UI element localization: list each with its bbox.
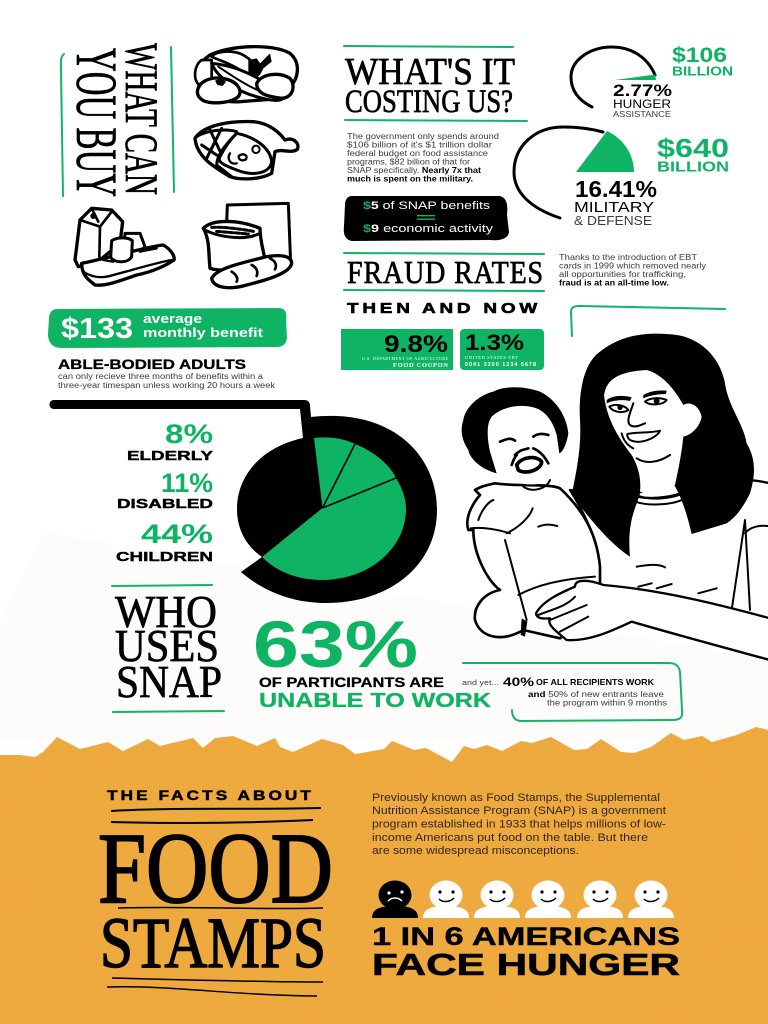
callout: 40 percent work: the program within 9 months bbox=[547, 698, 667, 708]
heading: who uses snap: USES bbox=[115, 620, 219, 671]
mother's arm lines bbox=[637, 520, 768, 610]
card: EBT 1.3 percent: 5041 3200 1234 5678 bbox=[465, 362, 536, 368]
text: fraud paragraph: Thanks to the introduction of EBT bbox=[559, 253, 697, 262]
icons: five happy people bbox=[423, 880, 674, 918]
card: food coupon 9.8 percent: 9.8% bbox=[384, 331, 448, 358]
heading: what's it costing us: COSTING US? bbox=[345, 84, 513, 120]
heading: the facts about food stamps: FOOD bbox=[98, 812, 333, 924]
chart: military arc bbox=[514, 127, 729, 228]
text: able-bodied adults: three-year timespan unless working 20 hours a week bbox=[58, 381, 276, 390]
legend: elderly disabled children: 11% bbox=[161, 468, 213, 498]
callout: 40 percent work bbox=[462, 663, 682, 721]
legend: elderly disabled children: DISABLED bbox=[117, 496, 213, 511]
legend: elderly disabled children: 8% bbox=[165, 419, 213, 449]
callout: economic activity bbox=[344, 196, 509, 241]
mother's face bbox=[604, 370, 702, 493]
text: fraud paragraph: cards in 1999 which removed nearly bbox=[559, 262, 706, 270]
heading: what's it costing us: WHAT'S IT bbox=[345, 51, 515, 93]
heading: who uses snap: WHO bbox=[115, 586, 217, 637]
callout: 40 percent work: OF ALL RECIPIENTS WORK bbox=[536, 677, 655, 687]
illustration: mother and child bbox=[462, 334, 768, 660]
stat: 63 percent unable to work: OF PARTICIPANTS ARE bbox=[259, 675, 444, 690]
legend: elderly disabled children: 44% bbox=[141, 519, 213, 549]
text: able-bodied adults bbox=[58, 357, 276, 390]
card: food coupon 9.8 percent: FOOD COUPON bbox=[393, 362, 448, 369]
heading: what can you buy bbox=[61, 43, 174, 197]
text: budget paragraph: SNAP specifically. Nearly 7x that bbox=[347, 166, 481, 175]
heading: the facts about food stamps bbox=[98, 787, 333, 996]
chart: hunger assistance arc: ASSISTANCE bbox=[613, 109, 671, 119]
text: budget paragraph: programs, $82 billion of that for bbox=[347, 158, 470, 166]
mother's hair bbox=[572, 334, 754, 557]
text: budget paragraph: federal budget on food assistance bbox=[347, 149, 489, 158]
chart: military arc: BILLION bbox=[657, 158, 729, 176]
text: intro paragraph: Nutrition Assistance Program (SNAP) is a government bbox=[372, 805, 666, 817]
chart: hunger assistance arc: $106 bbox=[672, 44, 727, 67]
chart: military arc: 16.41% bbox=[575, 176, 657, 202]
chart: military arc: $640 bbox=[657, 133, 729, 163]
chart: hunger assistance arc: 2.77% bbox=[613, 81, 672, 100]
icon: grains and bread bbox=[203, 203, 292, 288]
text: intro paragraph bbox=[372, 792, 666, 857]
callout: 133 dollars monthly benefit bbox=[48, 308, 287, 348]
heading: who uses snap: SNAP bbox=[116, 656, 222, 707]
text: intro paragraph: program established in 1933 that helps millions of low- bbox=[372, 818, 666, 830]
text: fraud paragraph: all opportunities for trafficking, bbox=[559, 270, 686, 279]
icon: dairy and eggs bbox=[75, 208, 174, 285]
mother's body bbox=[570, 480, 768, 660]
callout: 40 percent work: and 50% of new entrants leave bbox=[528, 690, 665, 699]
stat: 63 percent unable to work bbox=[253, 607, 492, 712]
stat: 63 percent unable to work: UNABLE TO WORK bbox=[259, 690, 492, 712]
legend: elderly disabled children bbox=[116, 419, 213, 564]
stat: 1 in 6 americans face hunger: 1 IN 6 AMERICANS bbox=[372, 923, 680, 951]
card: EBT 1.3 percent: 1.3% bbox=[465, 330, 524, 355]
text: fraud paragraph: fraud is at an all-time low. bbox=[559, 278, 669, 288]
text: budget paragraph bbox=[347, 132, 499, 184]
heading: fraud rates then and now: FRAUD RATES bbox=[347, 254, 544, 290]
card: food coupon 9.8 percent bbox=[341, 329, 453, 370]
callout: 133 dollars monthly benefit: monthly benefit bbox=[143, 325, 264, 340]
panel: torn orange paper bbox=[0, 720, 768, 1024]
heading: what can you buy: YOU BUY bbox=[64, 48, 129, 197]
callout: economic activity: $5 of SNAP benefits bbox=[363, 200, 491, 212]
legend: elderly disabled children: ELDERLY bbox=[127, 448, 213, 463]
card: food coupon 9.8 percent: U.S. DEPARTMENT OF AGRICULTURE bbox=[362, 356, 449, 361]
heading: the facts about food stamps: STAMPS bbox=[100, 903, 326, 983]
heading: what's it costing us bbox=[344, 46, 527, 121]
bracket line bbox=[571, 306, 725, 336]
stat: 63 percent unable to work: 63% bbox=[253, 607, 418, 681]
text: fraud paragraph bbox=[559, 253, 706, 288]
callout: 40 percent work: and yet... bbox=[462, 678, 499, 687]
text: able-bodied adults: ABLE-BODIED ADULTS bbox=[58, 357, 246, 372]
text: budget paragraph: much is spent on the military. bbox=[347, 174, 473, 184]
heading: what can you buy: WHAT CAN bbox=[115, 43, 167, 195]
chart: hunger assistance arc: HUNGER bbox=[613, 97, 671, 111]
baby's hair bbox=[462, 387, 568, 473]
text: able-bodied adults: can only recieve three months of benefits within a bbox=[58, 372, 264, 381]
text: intro paragraph: Previously known as Food Stamps, the Supplemental bbox=[372, 792, 660, 804]
chart: hunger assistance arc: BILLION bbox=[672, 64, 733, 78]
mother's hand bbox=[536, 581, 768, 660]
stat: 1 in 6 americans face hunger: FACE HUNGER bbox=[372, 947, 680, 982]
card: EBT 1.3 percent bbox=[460, 329, 544, 370]
heading: who uses snap bbox=[112, 585, 224, 712]
text: budget paragraph: $106 billion of it's $1 trillion dollar bbox=[347, 140, 492, 150]
stat: 1 in 6 americans face hunger bbox=[372, 923, 680, 982]
heading: fraud rates then and now: THEN AND NOW bbox=[347, 300, 541, 317]
chart: hunger assistance arc bbox=[571, 44, 733, 119]
chart: military arc: & DEFENSE bbox=[574, 213, 652, 228]
chart: who uses snap pie bbox=[50, 400, 437, 603]
text: budget paragraph: The government only spends around bbox=[347, 132, 499, 141]
icon: vegetables bbox=[195, 47, 297, 103]
icon: sad person bbox=[372, 880, 418, 918]
callout: economic activity: $9 economic activity bbox=[363, 223, 494, 235]
chart: military arc: MILITARY bbox=[574, 199, 654, 216]
heading: fraud rates then and now bbox=[344, 253, 544, 317]
callout: 133 dollars monthly benefit: average bbox=[143, 311, 202, 326]
callout: 40 percent work: 40% bbox=[503, 675, 534, 689]
baby's body bbox=[467, 483, 600, 638]
baby's head bbox=[485, 405, 559, 484]
heading: the facts about food stamps: THE FACTS ABOUT bbox=[107, 787, 314, 803]
text: intro paragraph: are some widespread misconceptions. bbox=[372, 845, 579, 857]
icon: ham bbox=[195, 122, 298, 179]
card: EBT 1.3 percent: UNITED STATES EBT bbox=[465, 355, 518, 360]
text: intro paragraph: income Americans put food on the table. But there bbox=[372, 832, 648, 844]
legend: elderly disabled children: CHILDREN bbox=[116, 549, 213, 564]
callout: 133 dollars monthly benefit: $133 bbox=[61, 313, 133, 345]
